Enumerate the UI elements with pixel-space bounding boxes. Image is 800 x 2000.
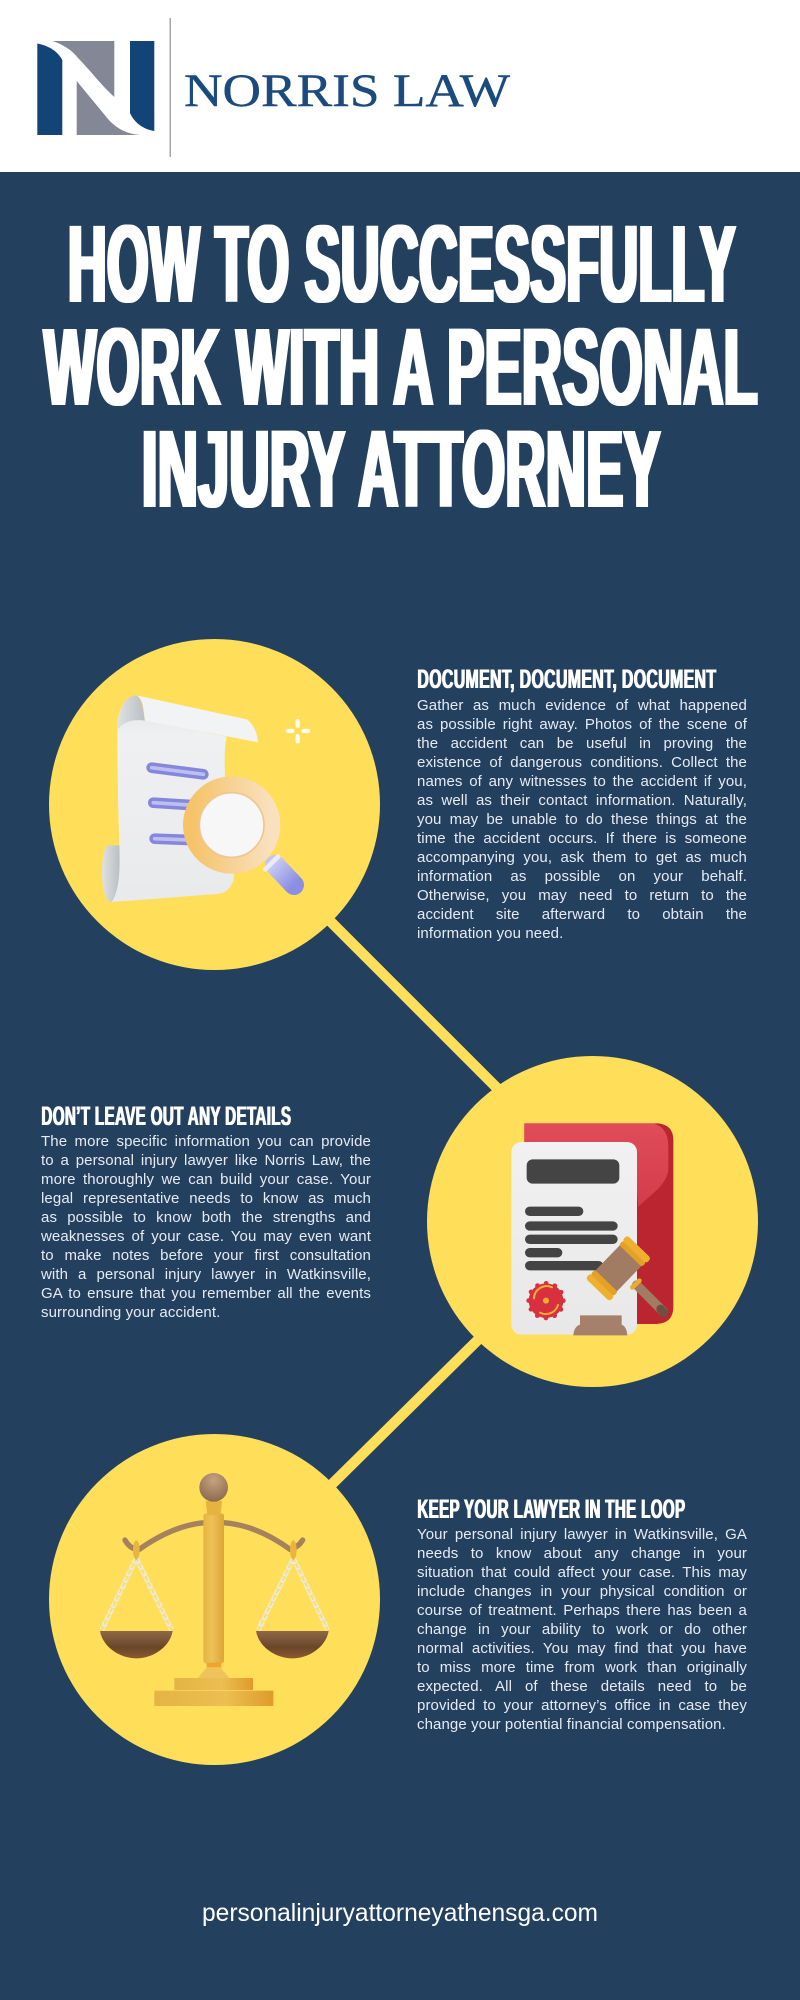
text: document: time the accident occurs. If there is someone [417,830,747,847]
text: document: existence of dangerous conditions. Collect the [417,754,747,771]
text: details [41,1133,371,1321]
text: loop: change your potential financial compensation. [417,1716,726,1733]
text: details: The more specific information you can provide [41,1133,371,1150]
logo wordmark: NORRIS LAW [184,65,511,117]
logo mark: N monogram [37,18,171,157]
circle 1 [49,639,380,970]
header band [0,0,800,172]
text: document: information as possible on your behalf. [417,868,747,885]
connector: circle 2 to circle 3 [320,1328,490,1496]
text: loop: situation that could affect your case. This may [417,1564,747,1581]
text: document: names of any witnesses to the accident if you, [417,773,747,790]
text: document: information you need. [417,925,563,942]
text: details: with a personal injury lawyer in Watkinsville, [41,1266,371,1283]
connector: circle 1 to circle 2 [320,911,505,1096]
title [42,203,758,531]
text: document: accompanying you, ask them to get as much [417,849,747,866]
heading: details: DON’T LEAVE OUT ANY DETAILS [41,1101,291,1131]
text: document: Gather as much evidence of what happened [417,697,747,714]
icon: scroll with magnifying glass [102,695,308,902]
text: details: surrounding your accident. [41,1304,220,1321]
text: loop: normal activities. You may find that you have [417,1640,747,1657]
text: details: GA to ensure that you remember all the events [41,1285,371,1302]
circle 2 [427,1056,758,1387]
text: loop [417,1526,747,1733]
logo: Norris Law [37,18,511,157]
panel: keep your lawyer in the loop [417,1494,747,1733]
text: loop: Your personal injury lawyer in Watkinsville, GA [417,1526,747,1543]
text: document: Otherwise, you may need to return to the [417,887,747,904]
text: details: to make notes before your first consultation [41,1247,371,1264]
icon: legal document with gavel [511,1123,673,1335]
text: details: to a personal injury lawyer like Norris Law, the [41,1152,371,1169]
panel: don't leave out any details [41,1101,371,1321]
text: document: you may be unable to do these things at the [417,811,747,828]
text: loop: provided to your attorney’s office in case they [417,1697,747,1714]
text: document: the accident can be useful in proving the [417,735,747,752]
text: loop: course of treatment. Perhaps there has been a [417,1602,747,1619]
text: document: accident site afterward to obtain the [417,906,747,923]
text: details: as possible to know both the strengths and [41,1209,371,1226]
text: loop: change in your ability to work or do other [417,1621,747,1638]
text: document: as well as their contact information. Naturally, [417,792,747,809]
text: details: legal representative needs to know as much [41,1190,371,1207]
text: loop: to miss more time from work than originally [417,1659,747,1676]
icon: scales of justice [100,1473,329,1706]
text: document: as possible right away. Photos of the scene of [417,716,747,733]
circle 3 [49,1434,380,1765]
text: loop: expected. All of these details need to be [417,1678,747,1695]
text: details: weaknesses of your case. You may even want [41,1228,371,1245]
text: loop: include changes in your physical condition or [417,1583,747,1600]
text: details: more thoroughly we can build your case. Your [41,1171,371,1188]
panel: document, document, document [417,664,747,942]
text: loop: needs to know about any change in your [417,1545,747,1562]
text: document [417,697,747,942]
footer website: personalinjuryattorneyathensga.com [202,1899,598,1927]
